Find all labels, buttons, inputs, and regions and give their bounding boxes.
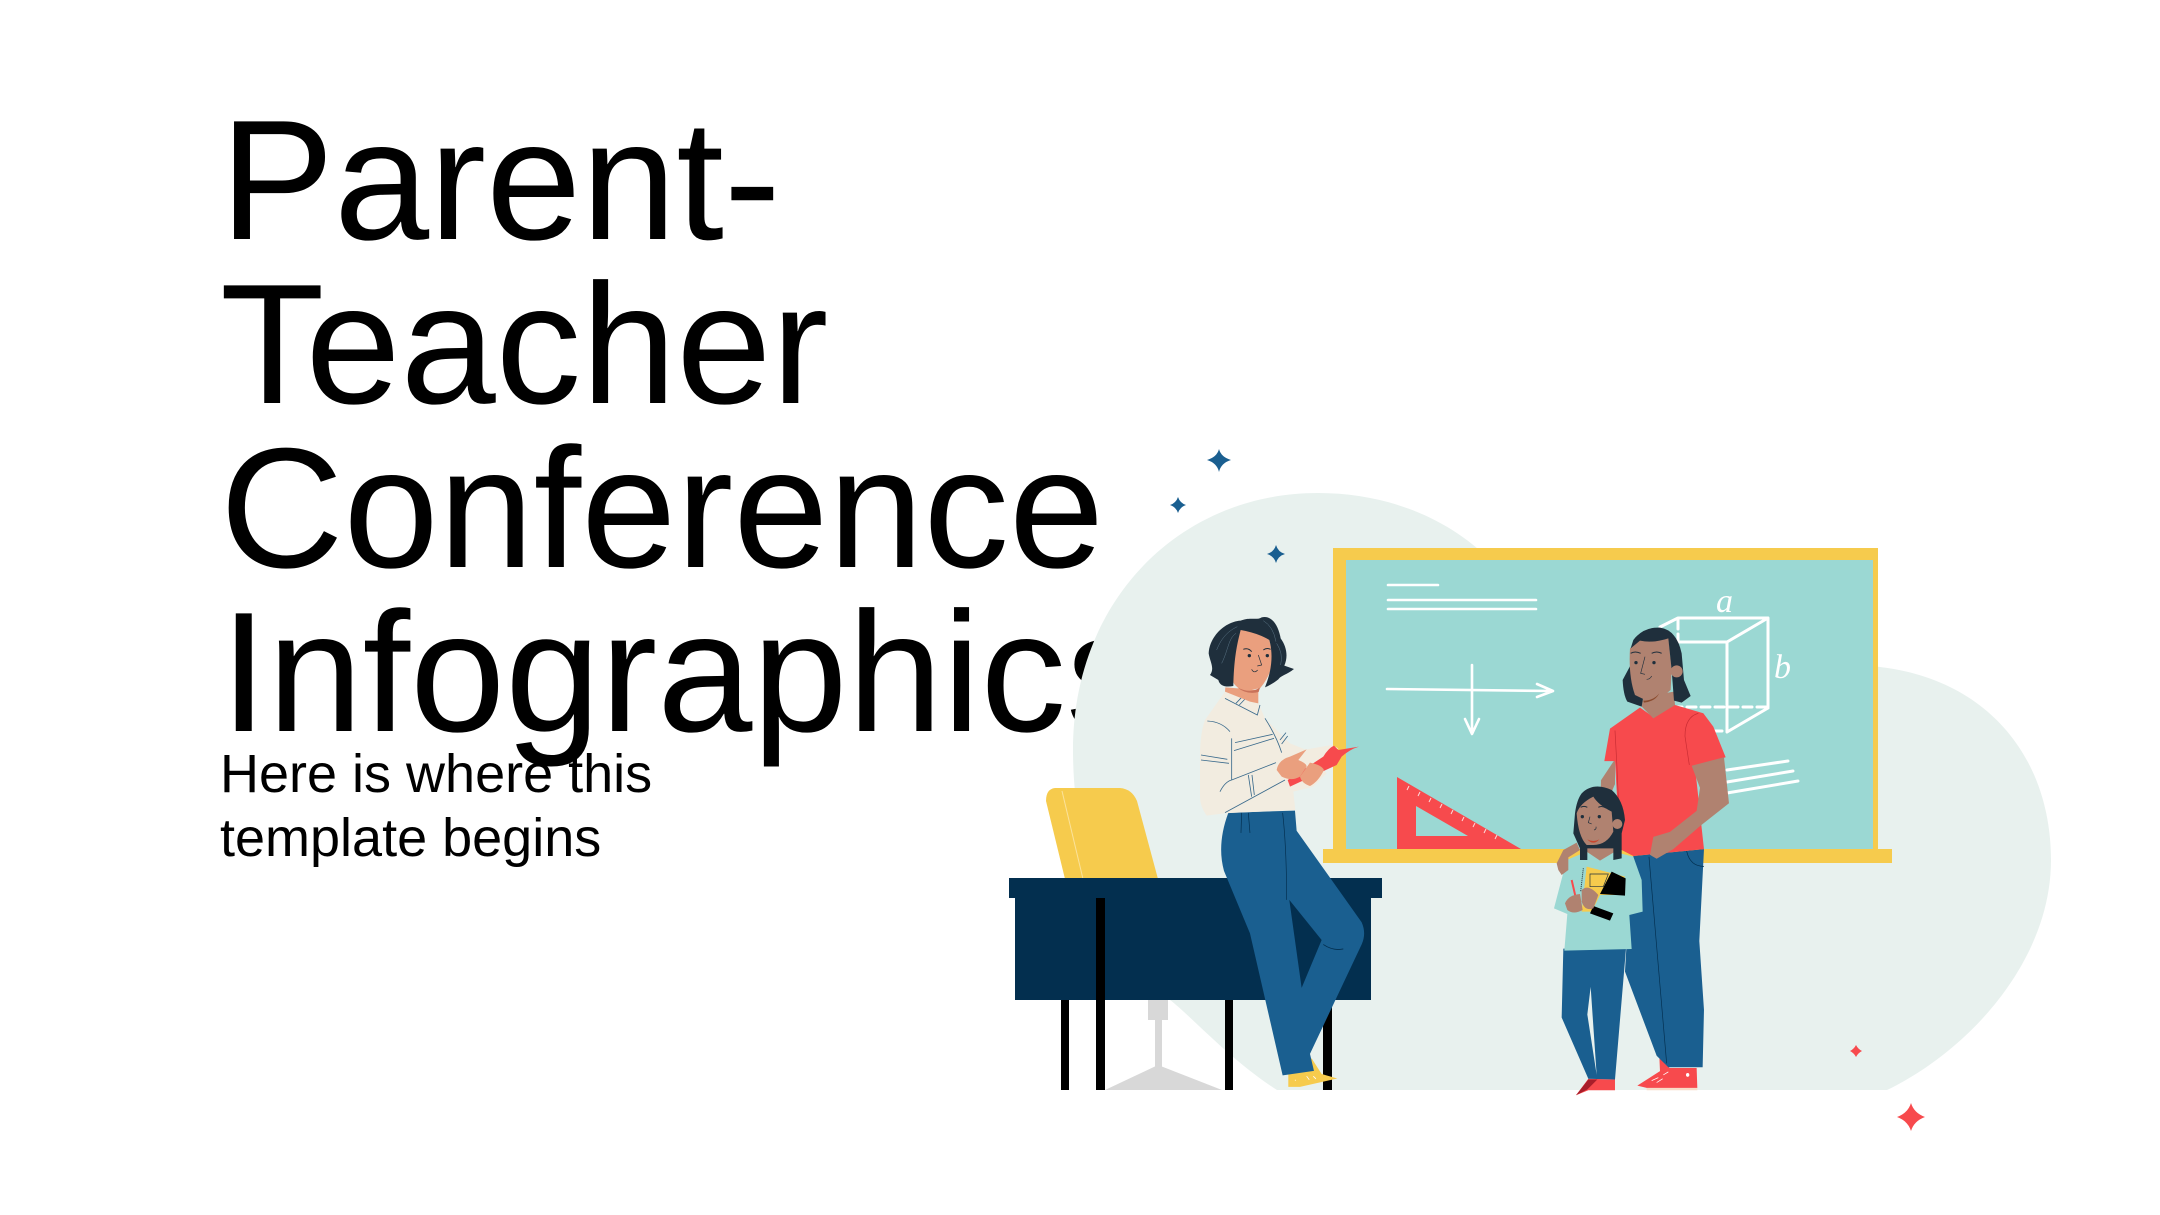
background blob xyxy=(1073,493,2051,1090)
subtitle xyxy=(220,744,652,868)
subtitle: Here is where this xyxy=(220,744,652,804)
title xyxy=(220,85,1152,768)
teacher chair xyxy=(1046,788,1222,1090)
father figure xyxy=(1600,628,1729,1090)
chalk letters: a xyxy=(1716,583,1733,620)
subtitle: template begins xyxy=(220,808,601,868)
desk xyxy=(1009,878,1382,1090)
title: Teacher xyxy=(220,249,828,440)
title: Infographics xyxy=(220,577,1152,768)
title: Conference xyxy=(220,413,1104,604)
child figure xyxy=(1554,787,1643,1095)
child trousers and shoes xyxy=(1562,949,1626,1095)
sparkles: blue stars xyxy=(1170,449,1285,563)
teacher trousers and shoes xyxy=(1221,811,1364,1087)
father trousers, shoes and shirt xyxy=(1600,704,1729,1090)
father head xyxy=(1623,628,1691,718)
ruler set square xyxy=(1397,777,1521,849)
chalkboard: b xyxy=(1774,649,1791,686)
teacher upper body and head xyxy=(1200,617,1359,816)
chalk writing xyxy=(1387,585,1798,793)
child upper body and head xyxy=(1554,787,1643,951)
teacher figure xyxy=(1200,617,1364,1087)
sparkles: red stars xyxy=(1850,1045,1925,1131)
title: Parent- xyxy=(220,85,781,276)
chalkboard xyxy=(1323,548,1892,863)
